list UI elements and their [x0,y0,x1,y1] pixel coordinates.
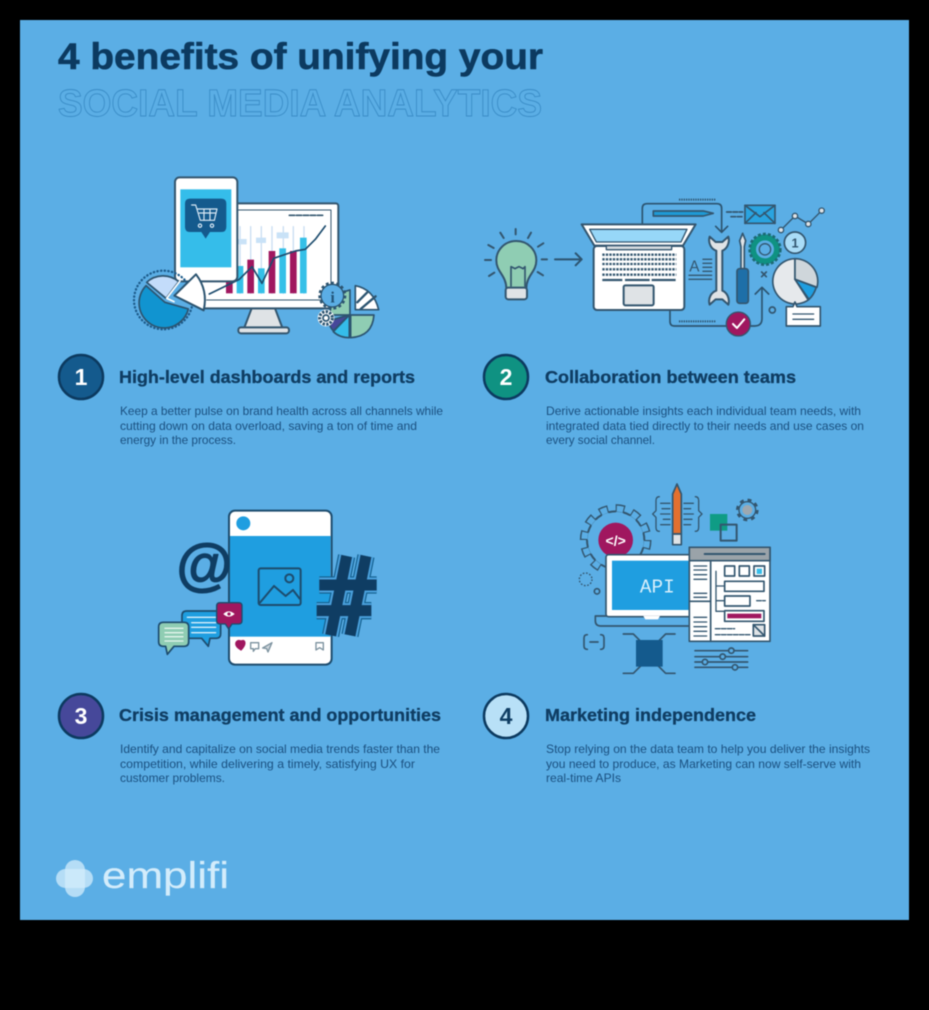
hash sign [317,556,377,635]
pie chart [773,259,818,304]
title: 4 benefits of unifying your [58,36,543,77]
number badge 3 [59,694,103,738]
pie chart right with gears: i [330,289,335,306]
illustration: crisis management [159,511,377,665]
small marks [579,573,604,649]
connector lines [642,200,769,326]
large gear [584,508,648,572]
body 2 [546,404,864,447]
chat bubble green [159,622,189,654]
heading 1: High-level dashboards and reports [119,367,415,387]
phone [175,177,237,281]
wrench [709,237,729,305]
body 3: Identify and capitalize on social media trends faster than the [120,742,440,756]
wireframe panel [689,547,770,641]
light bulb [485,229,547,299]
coin [784,232,806,253]
line chart [778,208,824,233]
body 4: Stop relying on the data team to help you deliver the insights [546,742,870,756]
small gear [737,500,757,520]
laptop API [595,555,702,626]
pencil and braces [653,484,702,545]
pie chart right with gears [319,284,379,338]
illustration: collaboration [485,200,824,336]
post card [229,511,332,665]
chip [623,634,675,673]
at sign: @ [176,533,232,597]
screwdriver [737,233,748,303]
body 2: integrated data tied directly to their needs and use cases on [546,419,864,433]
number badge 1 [59,355,103,399]
body 1: energy in the process. [120,433,236,447]
illustration: API [579,484,770,673]
action icons [236,641,323,652]
image icon [259,568,301,605]
pie chart left [134,271,205,329]
number badge 4: 4 [500,703,513,729]
body 3 [120,742,440,785]
heading 2: Collaboration between teams [545,367,796,387]
number badge 4 [484,694,528,738]
body 3: customer problems. [120,771,225,785]
eye badge [217,603,242,629]
number badge 2 [484,355,528,399]
title: SOCIAL MEDIA ANALYTICS [58,83,542,125]
chat bubble blue [182,611,221,646]
arrow [555,253,582,265]
body 2: Derive actionable insights each individual team needs, with [546,404,861,418]
heading 4: Marketing independence [545,705,756,725]
small marks [762,272,775,313]
coin: 1 [791,236,798,250]
body 1: Keep a better pulse on brand health across all channels while [120,404,443,418]
sliders [695,648,748,670]
logo: emplifi [102,855,229,896]
text lines icon: A [689,259,700,276]
title [58,36,543,125]
bar chart [209,226,325,294]
comment box [786,302,820,326]
heading 3: Crisis management and opportunities [119,705,441,725]
laptop [582,224,696,310]
logo [56,855,229,897]
squares [710,514,737,541]
laptop API: API [640,576,675,598]
number badge 2: 2 [500,364,512,390]
body 1 [120,404,443,447]
large gear: </> [606,532,626,548]
body 1: cutting down on data overload, saving a ton of time and [120,419,417,433]
number badge 3: 3 [75,703,87,729]
number badge 1: 1 [75,364,88,390]
body 2: every social channel. [546,433,655,447]
body 4 [546,742,870,785]
body 3: competition, while delivering a timely, satisfying UX for [120,757,415,771]
monitor [200,203,338,333]
pencil [653,211,713,216]
gear [750,234,780,265]
check badge [726,312,750,336]
body 4: real-time APIs [546,771,621,785]
text lines icon [689,259,712,279]
body 4: you need to produce, as Marketing can now self-serve with [546,757,861,771]
envelope [727,205,775,223]
illustration: dashboards and reports [134,177,379,338]
